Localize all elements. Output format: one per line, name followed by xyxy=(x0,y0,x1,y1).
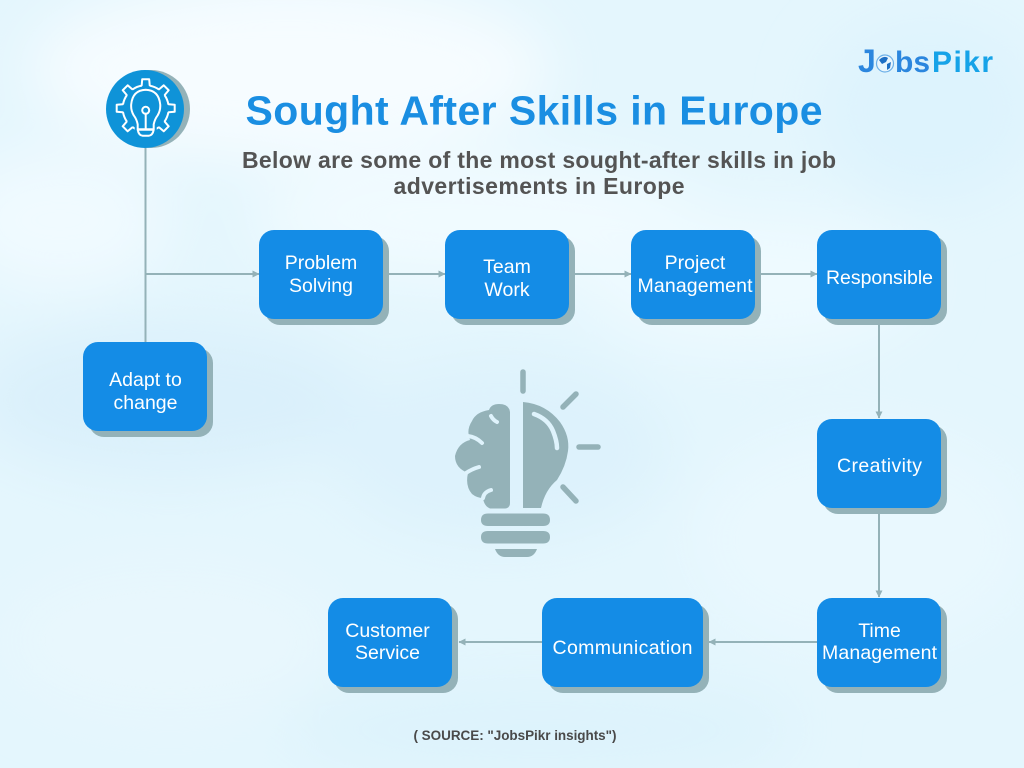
box: Creativity: Creativity xyxy=(837,455,922,477)
box: Adapt to change: change xyxy=(114,392,177,414)
box: Project Management xyxy=(631,230,761,325)
source note: ( SOURCE: "JobsPikr insights") xyxy=(414,728,616,743)
box: Team Work xyxy=(445,230,575,325)
box: Customer Service: Customer xyxy=(345,620,430,642)
box: Customer Service: Service xyxy=(355,642,420,664)
box: Problem Solving xyxy=(259,230,389,325)
box: Problem Solving: Problem xyxy=(285,252,357,274)
box: Team Work: Team xyxy=(483,256,531,278)
box: Communication: Communication xyxy=(552,637,692,659)
logo: JobsPikr: J xyxy=(858,43,876,79)
box: Communication xyxy=(542,598,709,693)
subtitle: advertisements in Europe xyxy=(394,173,684,199)
box: Time Management: Time xyxy=(858,620,901,642)
box: Responsible xyxy=(817,230,947,325)
icon: lightbulb gear badge xyxy=(106,70,190,148)
box: Project Management: Management xyxy=(638,275,753,297)
connector lines and arrows xyxy=(146,148,879,642)
logo: JobsPikr: Pikr xyxy=(932,46,993,79)
box: Team Work: Work xyxy=(484,279,530,301)
box: Customer Service xyxy=(328,598,458,693)
title: Sought After Skills in Europe xyxy=(246,88,822,134)
logo: JobsPikr xyxy=(858,43,993,79)
logo: JobsPikr: bs xyxy=(895,46,930,79)
box: Adapt to change xyxy=(83,342,213,437)
icon: brain lightbulb xyxy=(455,372,598,557)
box: Responsible: Responsible xyxy=(826,267,933,289)
box: Adapt to change: Adapt to xyxy=(109,369,182,391)
subtitle: Below are some of the most sought-after skills in job xyxy=(242,147,836,173)
box: Project Management: Project xyxy=(665,252,726,274)
box: Problem Solving: Solving xyxy=(289,275,353,297)
box: Creativity xyxy=(817,419,947,514)
subtitle xyxy=(242,147,836,199)
box: Time Management xyxy=(817,598,947,693)
box: Time Management: Management xyxy=(822,642,938,664)
